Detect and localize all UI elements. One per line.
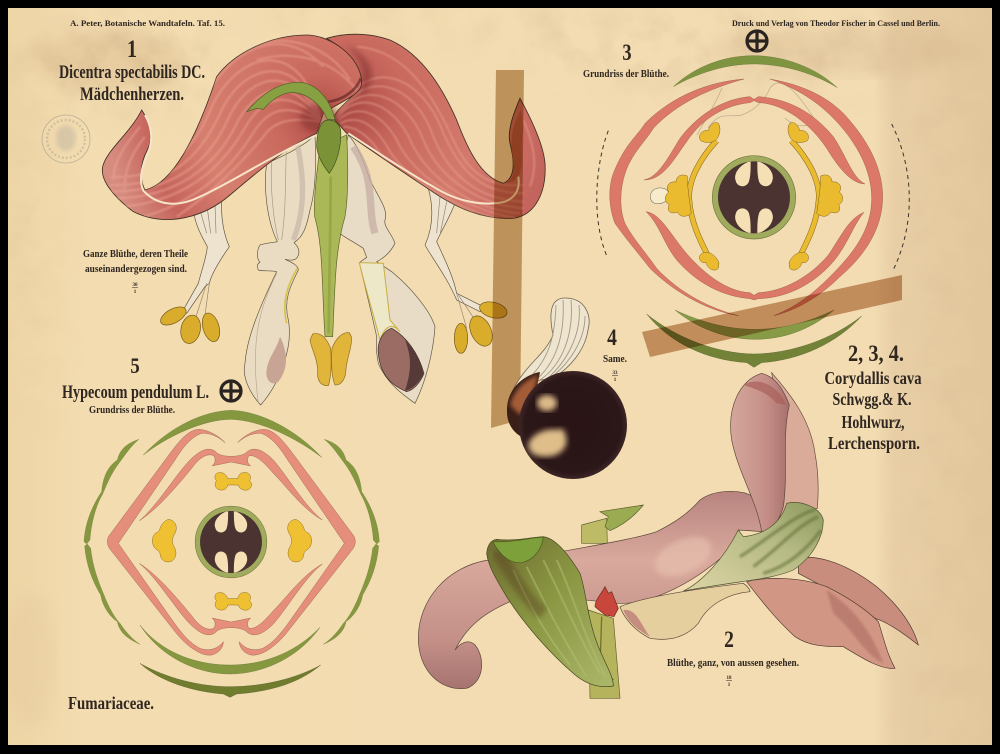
lower back petal (798, 557, 918, 645)
figure 5 heading: Hypecoum pendulum L. (62, 382, 209, 403)
caption figure 2: 1 (728, 683, 731, 688)
figure 4 label: Same. (603, 354, 627, 365)
caption figure 1 (83, 249, 188, 295)
figure 5 heading (62, 355, 209, 416)
yellow stamens (152, 472, 312, 610)
figure 5: Hypecoum floral diagram (84, 410, 379, 697)
Corydalis title: Corydallis cava (824, 368, 922, 388)
pink petals (107, 429, 355, 655)
figure 3 heading: Grundriss der Blüthe. (583, 69, 669, 80)
red outer petal right (327, 34, 545, 220)
icon: floral diagram cross 5 (221, 381, 241, 401)
Corydalis title: Schwgg.& K. (832, 389, 912, 409)
figure 4 label: 33 (612, 371, 618, 376)
inner petal left (244, 135, 316, 405)
spur and tube (418, 491, 763, 689)
library stamp (42, 115, 90, 163)
white stamen spur (650, 188, 669, 204)
figure 1 heading: 1 (127, 35, 137, 63)
stem (582, 505, 643, 698)
header left: A. Peter, Botanische Wandtafeln. Taf. 15. (70, 18, 225, 28)
green keel (683, 502, 823, 591)
figure 1 heading: Dicentra spectabilis DC. (59, 62, 205, 83)
green sepals (647, 56, 862, 367)
sepals and bracts (84, 410, 379, 697)
pencil signature (697, 83, 815, 135)
caption figure 2: 2 (724, 627, 734, 652)
caption figure 2 (667, 627, 799, 688)
tape strip diagonal (642, 275, 902, 357)
figure 4 label (603, 325, 627, 383)
caption figure 2: Blüthe, ganz, von aussen gesehen. (667, 658, 799, 669)
stamen bundle left (158, 197, 229, 345)
seed body (507, 371, 627, 479)
ovary (195, 506, 267, 578)
pink petals (610, 79, 883, 316)
figure 2: Corydalis flower (418, 373, 918, 698)
caption figure 1: Ganze Blüthe, deren Theile (83, 249, 188, 260)
figure 4 label: 4 (607, 325, 617, 350)
red outer petal left (102, 35, 362, 220)
figure 5 heading: 5 (130, 355, 140, 378)
caption figure 1: 30 (132, 283, 138, 288)
Corydalis title (824, 341, 922, 453)
caption figure 1: auseinandergezogen sind. (85, 264, 187, 275)
dashed outlines (597, 124, 909, 272)
tape strip vertical (491, 70, 524, 428)
yellow stamens (665, 123, 843, 270)
lower front petal (747, 578, 895, 668)
stamen bundle right (425, 188, 509, 353)
Corydalis title: Lerchensporn. (828, 433, 920, 453)
caption figure 1: 1 (134, 290, 137, 295)
green bract leaf (487, 537, 613, 687)
pistil (247, 82, 352, 386)
red bract (595, 587, 618, 617)
figure 1: Dicentra flower, parts separated (102, 34, 545, 405)
figure 5 heading: Grundriss der Blüthe. (89, 405, 175, 416)
figure 3: Corydalis floral diagram (597, 56, 909, 367)
figure 4 label: 1 (614, 378, 617, 383)
back hood petal (772, 373, 818, 517)
figure 1 heading: Mädchenherzen. (80, 84, 184, 105)
lower lip (620, 583, 750, 639)
figure 3 heading: 3 (622, 39, 632, 66)
front hood petal (731, 373, 789, 532)
inner petal right (340, 135, 435, 403)
figure 3 heading (583, 39, 669, 80)
icon: floral diagram cross 3 (747, 31, 767, 51)
figure 4: seed (507, 298, 627, 479)
Corydalis title: Hohlwurz, (842, 412, 904, 432)
figure 1 heading (59, 35, 205, 105)
header right: Druck und Verlag von Theodor Fischer in Cassel und Berlin. (732, 18, 940, 28)
caption figure 2: 18 (726, 676, 732, 681)
Corydalis title: 2, 3, 4. (848, 341, 904, 366)
ovary (712, 156, 796, 239)
fumariaceae label: Fumariaceae. (68, 693, 154, 713)
seed hair tuft (513, 298, 589, 390)
